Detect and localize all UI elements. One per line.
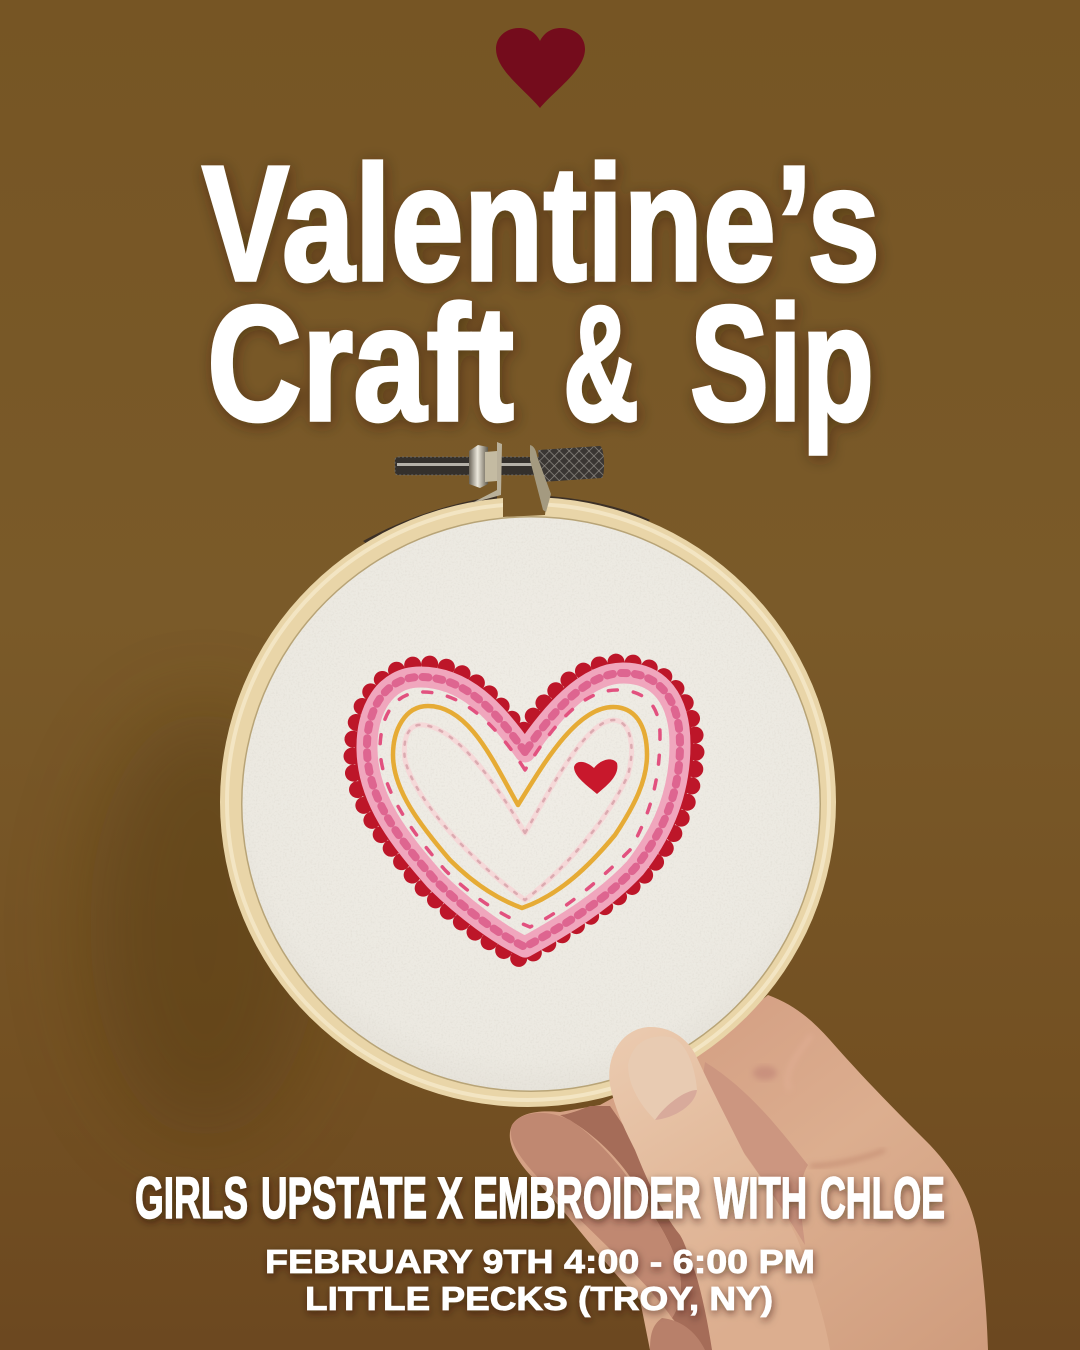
hoop cast shadow: [90, 710, 320, 1140]
hex nut: [469, 445, 488, 488]
subtitle: [135, 1166, 945, 1231]
outer ring: [220, 497, 836, 1107]
threaded shaft: [395, 457, 540, 475]
title: [202, 132, 880, 455]
event details: [265, 1243, 815, 1317]
subtitle: X: [437, 1166, 463, 1231]
thumbnail: [628, 1036, 697, 1120]
screw and brackets: [395, 442, 604, 512]
event details: FEBRUARY 9TH 4:00 - 6:00 PM: [265, 1243, 815, 1280]
left bracket: [472, 442, 502, 503]
small red heart: [574, 759, 617, 794]
subtitle: WITH: [714, 1166, 807, 1231]
pale dashed line: [404, 720, 632, 900]
title: Sip: [690, 272, 874, 455]
knurled knob: [538, 446, 604, 482]
dark rim: [363, 496, 497, 545]
pink dashed line: [380, 690, 660, 927]
pink chain band: [367, 673, 680, 947]
title: &: [563, 272, 639, 455]
fabric weave: [243, 518, 819, 1090]
subtitle: UPSTATE: [261, 1166, 427, 1231]
hand: fingers behind hoop: [510, 995, 988, 1350]
event details: LITTLE PECKS (TROY, NY): [305, 1280, 773, 1317]
fabric: [242, 518, 820, 1090]
subtitle: GIRLS: [135, 1166, 248, 1231]
hand: thumb over hoop: [609, 1027, 830, 1350]
subtitle: EMBROIDER: [473, 1166, 701, 1231]
embroidery hoop: [220, 490, 836, 1107]
finger shading: [560, 1106, 720, 1350]
icon: heart: [496, 28, 585, 108]
subtitle: CHLOE: [820, 1166, 945, 1231]
gap in ring: [503, 490, 548, 517]
pompom border: [352, 662, 696, 960]
right bracket: [530, 445, 551, 512]
title: Craft: [207, 272, 514, 455]
yellow line: [393, 706, 647, 908]
title: Valentine’s: [202, 132, 880, 315]
embroidered heart: [352, 662, 696, 960]
